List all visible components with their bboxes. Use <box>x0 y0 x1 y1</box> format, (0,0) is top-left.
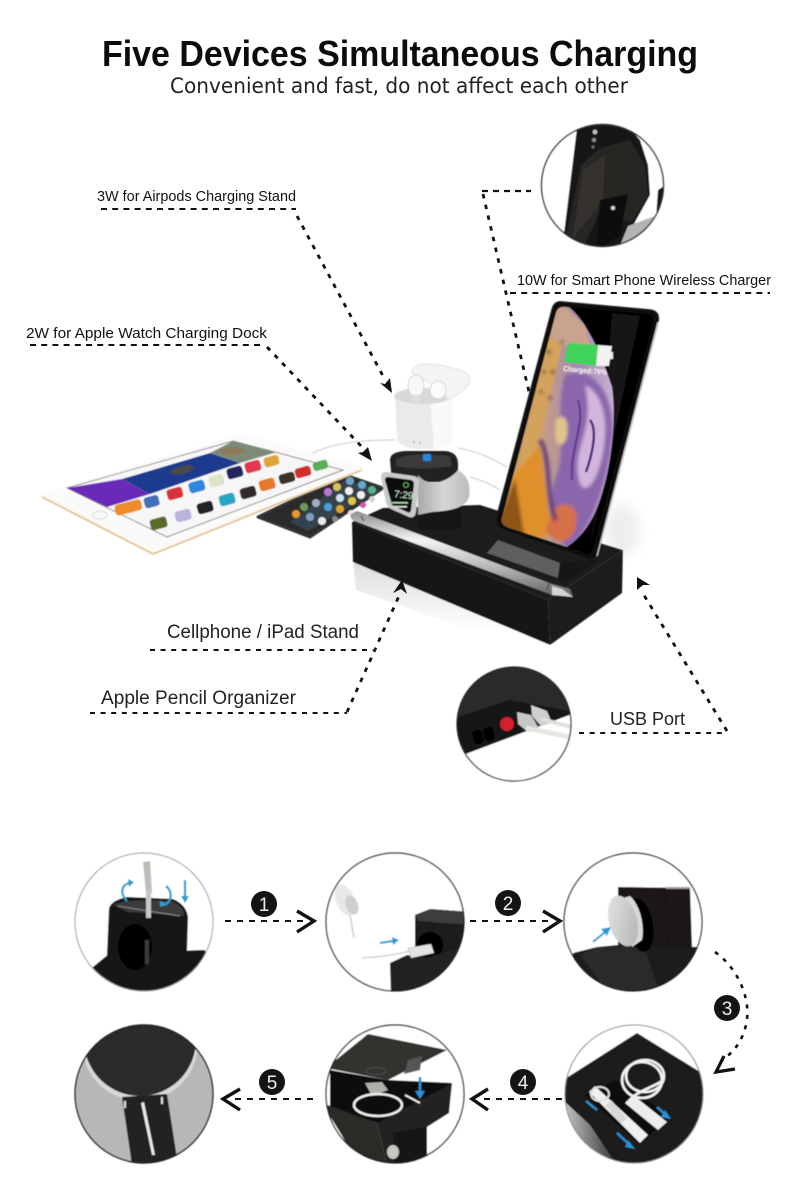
component: Apple Watch charging dock: 7:29 <box>393 489 414 502</box>
callout: Apple Pencil organizer <box>90 580 407 713</box>
step 4 badge <box>510 1069 536 1095</box>
battery indicator <box>564 343 598 366</box>
callout: USB port <box>579 577 727 733</box>
step 3 badge <box>714 995 740 1021</box>
blue direction arrow <box>415 1077 425 1099</box>
charging cables behind dock <box>313 440 507 490</box>
blue direction arrows <box>586 1101 671 1149</box>
callout: 3W AirPods stand <box>97 188 392 393</box>
step 6 circle: finished underside <box>74 1023 214 1165</box>
component: AirPods charging case <box>394 364 470 449</box>
component: Apple Watch charging dock <box>381 451 470 530</box>
component: Apple Pencil on dock <box>350 511 573 597</box>
callout: Apple Pencil organizer: Apple Pencil Organizer <box>101 688 297 709</box>
step 3 circle: attach disc charger <box>564 853 705 995</box>
callout: 10W phone wireless charger: 10W for Smart Phone Wireless Charger <box>517 272 771 289</box>
component: black dock base <box>352 505 623 645</box>
component: grey phone dock wedge <box>487 540 600 584</box>
battery label: Charged:76% <box>563 364 608 377</box>
step 1 badge: 1 <box>259 895 269 916</box>
callout: cellphone / iPad stand: Cellphone / iPad Stand <box>167 622 359 643</box>
detail circle: rear wireless charger <box>542 120 670 250</box>
step 3 badge: 3 <box>722 999 732 1020</box>
callout: USB port: USB Port <box>610 709 685 729</box>
step 2 badge <box>495 890 521 916</box>
device: iPad lying flat <box>42 435 362 554</box>
blue direction arrows <box>122 879 189 907</box>
detail circle: USB port <box>456 666 572 782</box>
wallpaper <box>500 306 615 548</box>
step 5 badge: 5 <box>267 1073 277 1094</box>
callout: 2W Apple Watch dock <box>26 325 372 461</box>
arrow: step 2 to 3 <box>470 911 560 932</box>
step 2 badge: 2 <box>503 894 513 915</box>
arrow: step 3 to 4 <box>715 952 747 1072</box>
subtitle: Convenient and fast, do not affect each other <box>170 74 628 98</box>
device: smartphone lying flat <box>258 475 383 537</box>
arrow: step 4 to 5 <box>472 1089 562 1110</box>
callout: 2W Apple Watch dock: 2W for Apple Watch Charging Dock <box>26 325 267 342</box>
step 5 circle: close lid <box>322 1025 464 1170</box>
blue direction arrow <box>380 937 399 945</box>
title: Five Devices Simultaneous Charging <box>102 33 698 74</box>
callout: 3W AirPods stand: 3W for Airpods Charging Stand <box>97 188 296 205</box>
callout: 10W phone wireless charger <box>482 191 771 392</box>
step 4 circle: cable storage compartment <box>560 1025 705 1170</box>
step 1 badge <box>251 891 277 917</box>
step 5 badge <box>259 1069 285 1095</box>
arrow: step 1 to 2 <box>225 911 314 932</box>
arrow: step 5 to 6 <box>223 1089 313 1110</box>
panel: product hero illustration <box>42 300 658 660</box>
floor shadow under dock <box>353 560 552 660</box>
device: smartphone on wireless charger <box>490 300 658 559</box>
iPad app icons <box>114 454 329 531</box>
blue direction arrow <box>593 927 611 942</box>
step 1 circle: insert cable into tower <box>75 853 215 995</box>
step 2 circle: charger cable and plug <box>326 853 470 995</box>
step 4 badge: 4 <box>518 1073 529 1094</box>
